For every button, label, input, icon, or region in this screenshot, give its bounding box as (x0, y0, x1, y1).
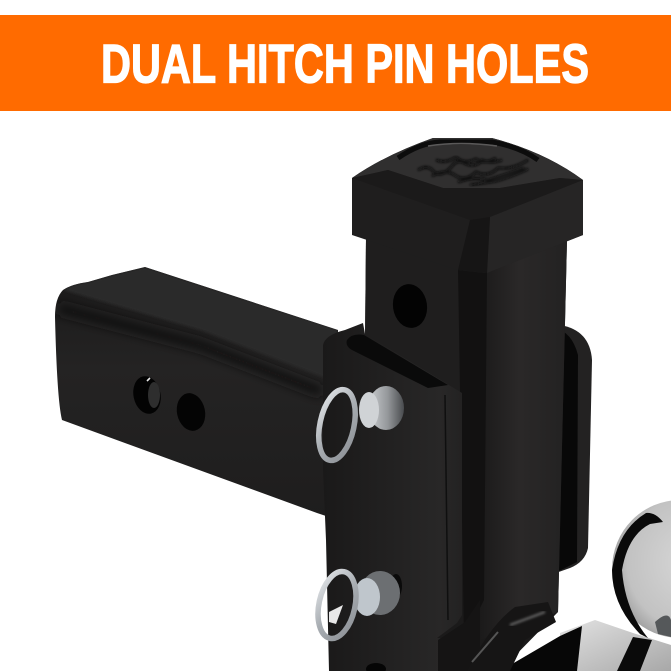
mount shaded side (500, 626, 582, 671)
vertical tube (365, 238, 567, 671)
weld and ball mount platform (467, 602, 671, 671)
plate slot (347, 335, 448, 388)
cap chamfer (352, 170, 583, 220)
cap recess ring (398, 142, 538, 160)
tube base (365, 238, 567, 671)
orange title banner (0, 15, 671, 111)
cap logo (418, 157, 528, 185)
upper tube hole (390, 282, 430, 330)
lower ring pin (312, 568, 402, 642)
end cap (352, 138, 583, 273)
rear bracket inner shadow (553, 328, 578, 574)
receiver shank with two pin holes (55, 267, 338, 520)
weld (467, 602, 556, 671)
lower hole (366, 663, 386, 671)
chrome hitch ball (612, 500, 671, 638)
cap right face (487, 180, 583, 273)
ball neck (617, 637, 652, 671)
shank hole 2 (173, 391, 209, 433)
tube right face (480, 240, 567, 640)
hitch body lower and sliding plate (323, 323, 480, 671)
rear bracket (553, 325, 592, 574)
cap front corner (458, 217, 490, 273)
tube left face (365, 238, 462, 410)
mount chrome (560, 620, 671, 671)
cap top face (352, 138, 583, 188)
upper ring pin (313, 386, 404, 464)
shank hole 1 (130, 374, 164, 416)
tube corner shadow (458, 268, 487, 640)
cap outline (352, 138, 583, 273)
